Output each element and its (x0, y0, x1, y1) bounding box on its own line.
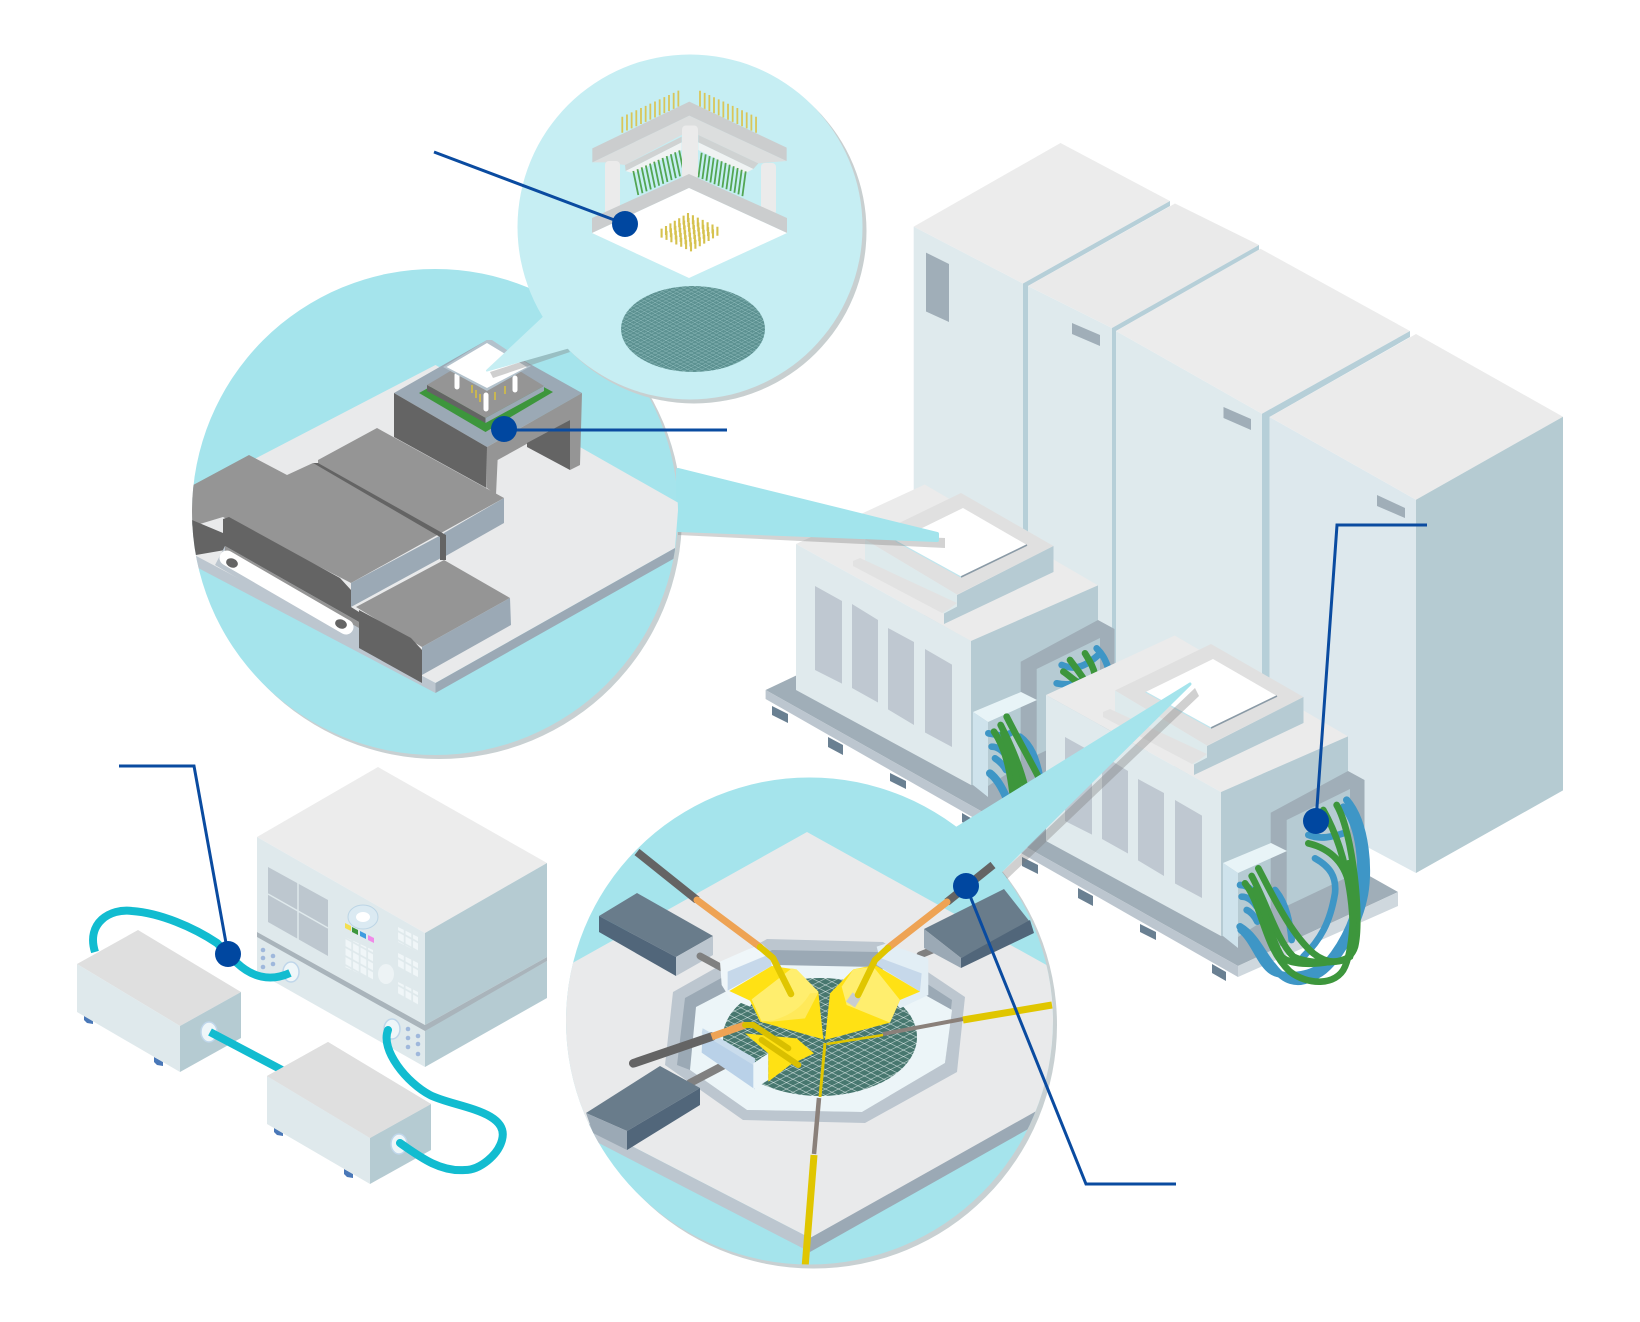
probe head back right (825, 865, 993, 1040)
probe stage contents (560, 832, 1070, 1268)
mounting bracket (215, 546, 359, 650)
upper chassis (257, 767, 547, 1031)
lower chassis (257, 937, 547, 1067)
connector ports (283, 962, 400, 1039)
screen (268, 867, 328, 956)
probe head back left (637, 852, 823, 1039)
callout tail shadow (678, 528, 945, 548)
circle shadow (196, 273, 682, 759)
board (560, 832, 1070, 1238)
box 2 top overlap (267, 1042, 431, 1138)
colour buttons (345, 923, 374, 943)
small instrument box 2 (267, 1042, 431, 1184)
probe circle shadow (570, 782, 1057, 1268)
test head machine back (766, 484, 1148, 830)
cables of back machine (988, 648, 1108, 798)
indicator dots left (261, 948, 275, 969)
green cables (1245, 805, 1357, 982)
leader line: test socket (491, 416, 727, 442)
small circle background (518, 54, 862, 400)
key pads (345, 927, 418, 1005)
cabinet 2 (1028, 204, 1259, 740)
board (185, 365, 679, 683)
enlarged board contents (180, 340, 679, 693)
small instrument box 1 (77, 930, 241, 1072)
teal coaxial cables (93, 911, 503, 1170)
thin probe wires (805, 1005, 1052, 1268)
leader line: coaxial cable (119, 766, 241, 967)
wafer (621, 286, 765, 372)
lower frame (592, 174, 787, 233)
octagon stage (665, 939, 965, 1123)
dial (348, 905, 378, 929)
leader line: cabling (1303, 525, 1427, 834)
probe callout tail shadow (1000, 688, 1199, 880)
knob (378, 964, 394, 984)
signal generator main unit (257, 767, 547, 1067)
circle background (192, 269, 678, 755)
leader line: wafer probe (953, 873, 1176, 1184)
gold contact pins (622, 91, 756, 133)
socket stage (394, 340, 582, 495)
test head machine front (1016, 636, 1398, 981)
small callout tail shadow (490, 347, 570, 378)
cabinet 1 (914, 143, 1170, 700)
server cabinets (914, 143, 1563, 873)
indicator dots right (406, 1027, 420, 1056)
heat block back (318, 428, 504, 557)
socket plate (592, 188, 787, 278)
cabinet 3 (1116, 249, 1410, 780)
manipulator block back left (599, 893, 722, 976)
probe circle background (566, 778, 1053, 1264)
callout tail (678, 470, 937, 540)
probe callout tail (900, 684, 1190, 900)
green needles (633, 150, 746, 196)
small circle tail (487, 300, 600, 371)
probe head front left (633, 1025, 814, 1089)
pillars (605, 126, 776, 215)
manipulator block front left (586, 1062, 730, 1150)
cables of front machine (1240, 800, 1366, 982)
leader line: probe card (434, 152, 638, 237)
callout circle: wafer probing (560, 684, 1199, 1268)
callout circle: probe card detail, small (487, 54, 866, 404)
probe card frame (592, 102, 787, 173)
socket pins (662, 213, 717, 251)
heat block middle (192, 455, 446, 622)
callout circle: probe card detail, large (180, 269, 945, 759)
small circle shadow (522, 58, 866, 404)
manipulator block back right (920, 889, 1034, 968)
heat block front (356, 560, 511, 683)
wafer on stage (723, 978, 917, 1096)
blue cables (1240, 800, 1366, 981)
cabinet 4 (1270, 334, 1563, 873)
